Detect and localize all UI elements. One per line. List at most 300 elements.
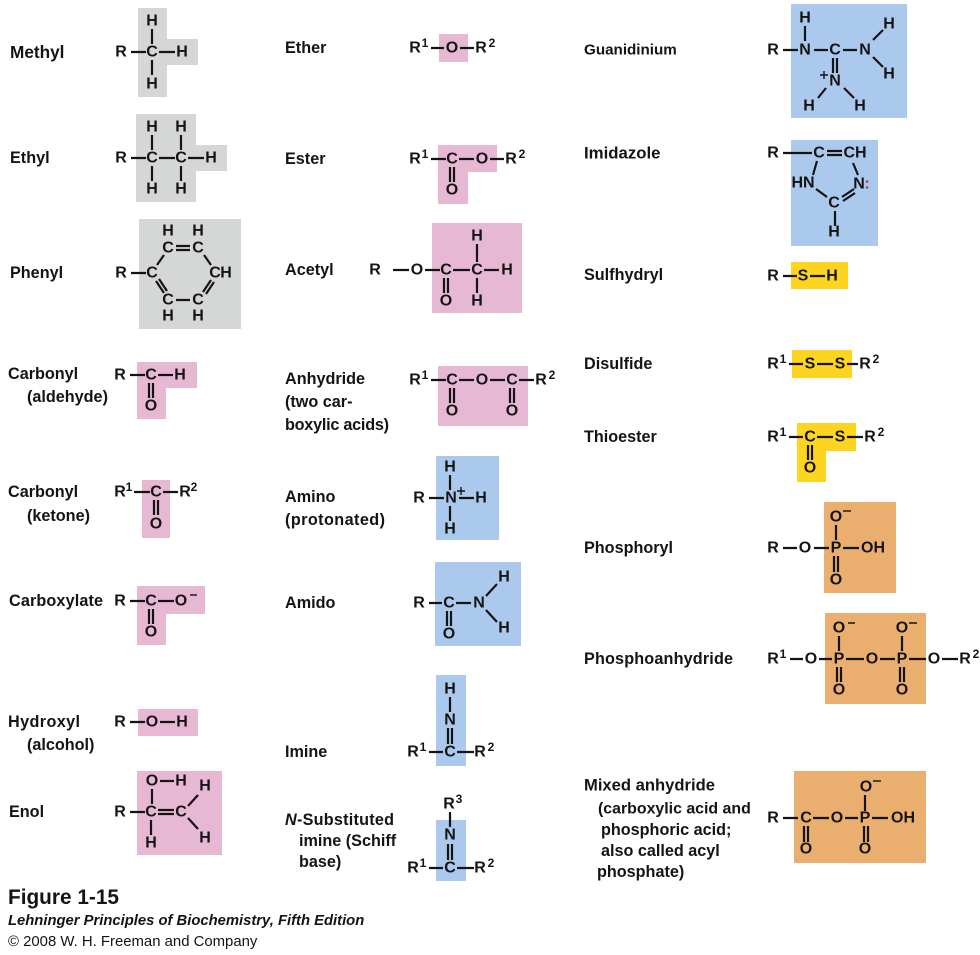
atoms: thioester: C: [804, 428, 816, 446]
atoms: phosphoanhydride: O: [866, 650, 878, 668]
plus charge: guanidinium: [820, 71, 828, 79]
atoms: aldehyde: H: [174, 366, 186, 384]
label: thioester: Thioester: [584, 428, 658, 446]
atoms: enol: H: [199, 778, 211, 794]
atoms: ethyl: H: [175, 118, 187, 136]
atoms: enol: C: [145, 804, 157, 820]
atoms: anhydride: O: [446, 402, 458, 420]
panel: ethyl: [10, 114, 227, 202]
label: N-substituted imine: imine (Schiff: [299, 832, 397, 850]
label: carbonyl aldehyde: [8, 365, 108, 406]
atoms: aldehyde: C: [145, 366, 157, 384]
label: mixed anhydride: phosphoric acid;: [601, 821, 731, 839]
atoms: guanidinium: N: [799, 42, 811, 58]
atoms: anhydride: C: [506, 372, 518, 388]
atoms: mixed anhydride: [767, 778, 915, 858]
bonds: hydroxyl: [130, 721, 175, 723]
bonds: amido: [429, 584, 497, 626]
atoms: methyl: [115, 12, 188, 92]
atoms: ketone: R: [179, 484, 191, 500]
atoms: ester: 2: [519, 147, 526, 161]
panel: anhydride: [285, 366, 556, 434]
label: disulfide: Disulfide: [584, 355, 652, 373]
bonds: methyl: [131, 29, 175, 75]
atoms: phenyl: C: [162, 240, 174, 256]
atoms: ester: 1: [422, 147, 429, 161]
atoms: phosphoanhydride: P: [834, 650, 845, 668]
atoms: enol: R: [114, 804, 126, 820]
atoms: carboxylate: [114, 592, 187, 640]
highlight: ether: [439, 34, 468, 62]
panel: phosphoanhydride: [584, 613, 980, 704]
panel: ester: [285, 145, 526, 204]
label: hydroxyl: (alcohol): [27, 736, 94, 754]
atoms: ethyl: R: [115, 150, 127, 166]
atoms: Schiff base: N: [444, 826, 456, 844]
bonds: ester: [431, 159, 504, 182]
atoms: mixed anhydride: OH: [891, 810, 915, 826]
atoms: ethyl: [115, 118, 217, 198]
atoms: phosphoanhydride: O: [833, 682, 845, 698]
label: mixed anhydride: [584, 776, 751, 881]
atoms: mixed anhydride: O: [859, 840, 871, 858]
atoms: ether: 1: [422, 36, 429, 50]
panel: imine: [285, 675, 495, 766]
atoms: ketone: O: [150, 516, 162, 532]
label: mixed anhydride: phosphate): [597, 863, 684, 881]
label: N-substituted imine: N-Substituted: [285, 811, 394, 829]
highlight: phenyl: [139, 219, 241, 329]
atoms: ester: [409, 147, 526, 198]
label: carbonyl aldehyde: (aldehyde): [27, 388, 108, 406]
atoms: anhydride: R: [535, 372, 547, 388]
atoms: ether: 2: [489, 36, 496, 50]
atoms: ester: R: [505, 150, 517, 168]
atoms: Schiff base: 2: [488, 856, 495, 870]
atoms: phosphoanhydride: O: [928, 650, 940, 668]
atoms: mixed anhydride: O: [800, 840, 812, 858]
label: acetyl: Acetyl: [285, 261, 334, 279]
atoms: amino: N: [445, 490, 457, 506]
bonds: acetyl: [393, 244, 499, 293]
atoms: Schiff base: 1: [420, 856, 427, 870]
highlight: disulfide: [792, 350, 852, 378]
atoms: methyl: C: [146, 44, 158, 60]
atoms: sulfhydryl: S: [798, 268, 809, 284]
atoms: acetyl: C: [440, 262, 452, 278]
atoms: amino: H: [444, 458, 456, 476]
atoms: amido: O: [443, 626, 455, 642]
bonds: mixed anhydride: [783, 795, 888, 842]
atoms: acetyl: [369, 228, 513, 310]
bonds: anhydride: [431, 380, 534, 403]
highlight: thioester: [797, 423, 856, 482]
atoms: phenyl: H: [162, 222, 174, 240]
atoms: imine: 2: [488, 740, 495, 754]
copyright: © 2008 W. H. Freeman and Company: [8, 934, 258, 950]
atoms: guanidinium: N: [829, 72, 841, 90]
atoms: phenyl: C: [192, 240, 204, 256]
atoms: acetyl: H: [471, 228, 483, 244]
atoms: imine: C: [444, 744, 456, 760]
atoms: phenyl: C: [209, 264, 221, 282]
atoms: guanidinium: N: [859, 42, 871, 58]
highlight: phosphoryl: [824, 502, 896, 593]
bonds: ethyl: [131, 135, 204, 181]
atoms: imidazole: CH: [843, 144, 867, 162]
bonds: sulfhydryl: [783, 275, 825, 277]
atoms: phosphoanhydride: R: [767, 650, 779, 668]
highlight: guanidinium: [791, 4, 907, 118]
label: carboxylate: Carboxylate: [9, 592, 103, 610]
atoms: phenyl: C: [146, 264, 158, 282]
atoms: thioester: R: [864, 428, 876, 446]
panel: amido: [285, 562, 521, 646]
atoms: methyl: H: [176, 44, 188, 60]
bonds: imine: [429, 697, 474, 752]
label: N-substituted imine: base): [299, 853, 341, 871]
minus charge: mixed anhydride: [873, 780, 881, 782]
label: imidazole: Imidazole: [584, 144, 660, 162]
atoms: amido: R: [413, 594, 425, 612]
atoms: imine: N: [444, 712, 456, 728]
atoms: thioester: O: [804, 460, 816, 476]
atoms: ether: [409, 36, 496, 56]
highlight: imine: [436, 675, 466, 766]
atoms: guanidinium: H: [883, 66, 895, 82]
atoms: amido: C: [443, 594, 455, 612]
highlight: sulfhydryl: [791, 262, 848, 289]
atoms: hydroxyl: R: [114, 714, 126, 730]
highlight: Schiff base: [436, 820, 466, 881]
label: enol: Enol: [9, 803, 44, 821]
atoms: phosphoanhydride: [767, 620, 980, 698]
atoms: sulfhydryl: [767, 268, 838, 284]
atoms: carboxylate: O: [175, 592, 187, 610]
atoms: imidazole: C: [813, 144, 825, 162]
atoms: hydroxyl: O: [146, 714, 158, 730]
highlight: amino: [436, 456, 499, 540]
panel: mixed anhydride: [584, 771, 926, 881]
atoms: disulfide: [767, 352, 880, 372]
atoms: amido: H: [498, 568, 510, 586]
atoms: guanidinium: H: [854, 98, 866, 114]
atoms: phenyl: C: [192, 292, 204, 308]
atoms: anhydride: 1: [422, 368, 429, 382]
atoms: imidazole: N: [853, 176, 865, 192]
atoms: Schiff base: [407, 792, 495, 876]
atoms: Schiff base: R: [407, 860, 419, 876]
atoms: disulfide: 2: [873, 352, 880, 366]
atoms: phenyl: H: [192, 308, 204, 324]
atoms: guanidinium: R: [767, 42, 779, 58]
atoms: phenyl: H: [220, 264, 232, 282]
atoms: phosphoryl: R: [767, 540, 779, 556]
atoms: ethyl: H: [146, 118, 158, 136]
panel: thioester: [584, 423, 885, 482]
panel: phosphoryl: [584, 502, 896, 593]
panel: methyl: [10, 8, 198, 97]
atoms: amido: N: [473, 594, 485, 612]
label: N-substituted imine: [285, 811, 397, 871]
highlight: amido: [435, 562, 521, 646]
atoms: acetyl: H: [501, 262, 513, 278]
atoms: phosphoanhydride: O: [805, 650, 817, 668]
panel: phenyl: [10, 219, 241, 329]
bonds: Schiff base: [429, 812, 474, 868]
bonds: phenyl: [131, 246, 214, 300]
label: carbonyl ketone: (ketone): [27, 507, 90, 525]
bonds: aldehyde: [130, 375, 173, 398]
atoms: ketone: [114, 480, 198, 532]
atoms: ester: O: [476, 150, 488, 168]
highlight: aldehyde: [137, 362, 197, 419]
atoms: acetyl: C: [471, 262, 483, 278]
atoms: ether: R: [409, 40, 421, 56]
atoms: phosphoryl: [767, 508, 885, 588]
atoms: ketone: R: [114, 484, 126, 500]
atoms: disulfide: S: [835, 356, 846, 372]
atoms: phenyl: C: [162, 292, 174, 308]
atoms: hydroxyl: H: [176, 714, 188, 730]
atoms: mixed anhydride: P: [860, 810, 871, 826]
atoms: Schiff base: R: [443, 796, 455, 812]
minus charges: phosphoanhydride: [848, 622, 917, 624]
panel: disulfide: [584, 350, 880, 378]
atoms: phosphoanhydride: O: [896, 620, 908, 636]
label: imine: Imine: [285, 743, 327, 761]
bonds: guanidinium: [783, 26, 883, 98]
atoms: ether: R: [475, 40, 487, 56]
atoms: aldehyde: O: [145, 398, 157, 414]
minus charge: phosphoryl: [843, 510, 851, 512]
bonds: amino: [429, 475, 474, 521]
panel: carboxylate: [9, 586, 205, 645]
label: amino: [285, 488, 385, 529]
atoms: ethyl: C: [175, 150, 187, 166]
atoms: ketone: C: [150, 484, 162, 500]
atoms: thioester: [767, 425, 885, 476]
panel: amino: [285, 456, 499, 540]
atoms: anhydride: O: [476, 372, 488, 388]
label: anhydride: Anhydride: [285, 370, 365, 388]
atoms: phenyl: R: [115, 264, 127, 282]
atoms: ester: C: [446, 150, 458, 168]
label: amido: Amido: [285, 594, 335, 612]
atoms: Schiff base: R: [474, 860, 486, 876]
atoms: ethyl: H: [205, 150, 217, 166]
atoms: phosphoanhydride: 1: [780, 647, 787, 661]
label: hydroxyl: [8, 713, 94, 754]
atoms: phosphoanhydride: O: [896, 682, 908, 698]
atoms: enol: [114, 772, 211, 852]
atoms: imidazole: [767, 144, 870, 240]
atoms: ethyl: C: [146, 150, 158, 166]
atoms: mixed anhydride: R: [767, 810, 779, 826]
highlight: acetyl: [432, 223, 522, 313]
atoms: enol: H: [175, 772, 187, 790]
figure number: Figure 1-15: [8, 886, 119, 909]
atoms: methyl: H: [146, 76, 158, 92]
highlight: hydroxyl: [138, 709, 198, 736]
panel: ether: [285, 34, 496, 62]
panel: acetyl: [285, 223, 522, 313]
label: anhydride: boxylic acids): [285, 416, 389, 434]
atoms: imine: R: [474, 744, 486, 760]
atoms: phosphoryl: OH: [861, 540, 885, 556]
bonds: thioester: [789, 437, 863, 460]
panel: imidazole: [584, 140, 878, 246]
atoms: ester: O: [446, 182, 458, 198]
highlight: phosphoanhydride: [825, 613, 926, 704]
atoms: imidazole: C: [828, 194, 840, 212]
atoms: ester: R: [409, 150, 421, 168]
atoms: amino: R: [413, 490, 425, 506]
highlight: imidazole: [791, 140, 878, 246]
atoms: anhydride: O: [506, 402, 518, 420]
atoms: phosphoanhydride: O: [833, 620, 845, 636]
atoms: phenyl: [115, 222, 232, 324]
atoms: disulfide: 1: [780, 352, 787, 366]
atoms: ethyl: H: [175, 180, 187, 198]
book title: Lehninger Principles of Biochemistry, Fifth Edition: [8, 913, 364, 929]
atoms: imidazole: HN: [791, 174, 815, 192]
label: carbonyl ketone: Carbonyl: [8, 483, 78, 501]
atoms: imine: R: [407, 744, 419, 760]
panel: hydroxyl: [8, 709, 198, 754]
atoms: phenyl: H: [192, 222, 204, 240]
atoms: amido: H: [498, 620, 510, 636]
atoms: phenyl: H: [162, 308, 174, 324]
highlight: ethyl: [136, 114, 227, 202]
label: mixed anhydride: also called acyl: [601, 842, 720, 860]
plus charge: amino: [457, 487, 465, 495]
atoms: methyl: R: [115, 44, 127, 60]
atoms: mixed anhydride: O: [860, 778, 872, 796]
bonds: imidazole: [783, 151, 858, 226]
atoms: anhydride: [409, 368, 556, 420]
panel: carbonyl ketone: [8, 480, 198, 538]
label: amino: Amino: [285, 488, 335, 506]
atoms: carboxylate: C: [145, 592, 157, 610]
caption: figure title and source: [8, 886, 364, 950]
atoms: thioester: R: [767, 428, 779, 446]
atoms: hydroxyl: [114, 714, 188, 730]
bonds: enol: [130, 781, 198, 835]
atoms: acetyl: R: [369, 262, 381, 278]
atoms: thioester: 1: [780, 425, 787, 439]
label: ester: Ester: [285, 150, 326, 168]
atoms: sulfhydryl: H: [826, 268, 838, 284]
atoms: imidazole: H: [828, 224, 840, 240]
bonds: ketone: [134, 492, 178, 515]
atoms: thioester: 2: [878, 425, 885, 439]
atoms: phosphoanhydride: P: [897, 650, 908, 668]
atoms: amido: [413, 568, 510, 642]
label: hydroxyl: Hydroxyl: [8, 713, 80, 731]
atoms: acetyl: O: [411, 262, 423, 278]
atoms: enol: H: [145, 834, 157, 852]
atoms: anhydride: 2: [549, 368, 556, 382]
label: carbonyl ketone: [8, 483, 90, 525]
label: ether: Ether: [285, 39, 327, 57]
panel: carbonyl aldehyde: [8, 362, 197, 419]
atoms: phosphoryl: O: [830, 508, 842, 526]
atoms: aldehyde: R: [114, 366, 126, 384]
label: ethyl: Ethyl: [10, 149, 50, 167]
atoms: phosphoryl: O: [799, 540, 811, 556]
label: mixed anhydride: (carboxylic acid and: [598, 800, 751, 818]
atoms: carboxylate: R: [114, 592, 126, 610]
highlight: enol: [137, 771, 222, 855]
label: guanidinium: Guanidinium: [584, 42, 677, 58]
atoms: guanidinium: C: [829, 42, 841, 58]
bonds: disulfide: [789, 363, 858, 365]
atoms: ether: O: [446, 40, 458, 56]
atoms: amino: H: [475, 490, 487, 506]
atoms: anhydride: R: [409, 372, 421, 388]
highlight: ester: [438, 145, 497, 204]
atoms: phosphoryl: O: [830, 572, 842, 588]
atoms: phosphoanhydride: 2: [973, 647, 980, 661]
atoms: guanidinium: H: [799, 10, 811, 26]
atoms: sulfhydryl: R: [767, 268, 779, 284]
label: sulfhydryl: Sulfhydryl: [584, 266, 663, 284]
atoms: enol: O: [146, 772, 158, 790]
atoms: disulfide: R: [767, 356, 779, 372]
atoms: enol: H: [199, 830, 211, 846]
atoms: methyl: H: [146, 12, 158, 30]
atoms: imidazole: R: [767, 144, 779, 162]
label: amino: (protonated): [285, 511, 385, 529]
label: anhydride: (two car-: [285, 393, 352, 411]
highlight: mixed anhydride: [794, 771, 926, 863]
highlight: carboxylate: [137, 586, 205, 645]
atoms: guanidinium: H: [883, 16, 895, 32]
atoms: Schiff base: C: [444, 860, 456, 876]
label: phosphoryl: Phosphoryl: [584, 539, 673, 557]
atoms: aldehyde: [114, 366, 186, 414]
panel: N-substituted imine: [285, 792, 495, 881]
highlight: ketone: [142, 480, 170, 538]
atoms: enol: C: [175, 804, 187, 820]
atoms: thioester: S: [835, 428, 846, 446]
label: anhydride: [285, 370, 389, 434]
atoms: phosphoryl: P: [831, 540, 842, 556]
label: phenyl: Phenyl: [10, 264, 63, 282]
atoms: Schiff base: 3: [456, 792, 463, 806]
atoms: disulfide: R: [859, 356, 871, 372]
label: mixed anhydride: Mixed anhydride: [584, 776, 715, 794]
atoms: ketone: 2: [191, 480, 198, 494]
atoms: amino: H: [444, 520, 456, 538]
label: phosphoanhydride: Phosphoanhydride: [584, 650, 733, 668]
panel: guanidinium: [584, 4, 907, 118]
atoms: imine: H: [444, 680, 456, 698]
label: carbonyl aldehyde: Carbonyl: [8, 365, 78, 383]
minus charge: carboxylate: [190, 594, 197, 596]
bonds: phosphoryl: [783, 525, 859, 572]
bonds: phosphoanhydride: [790, 636, 958, 682]
atoms: imidazole: :: [864, 176, 870, 192]
highlight: methyl: [138, 8, 198, 97]
atoms: acetyl: H: [471, 292, 483, 310]
atoms: guanidinium: H: [803, 98, 815, 114]
atoms: phosphoanhydride: R: [959, 650, 971, 668]
atoms: disulfide: S: [805, 356, 816, 372]
atoms: imine: [407, 680, 495, 760]
panel: enol: [9, 771, 222, 855]
